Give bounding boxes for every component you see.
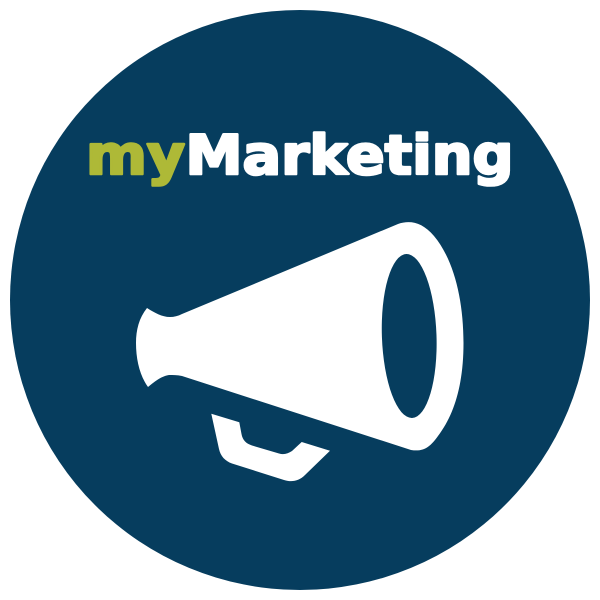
title part: Marketing: Marketing	[186, 124, 514, 187]
megaphone opening	[379, 253, 439, 419]
megaphone horn	[136, 222, 464, 450]
icon: megaphone	[136, 222, 464, 481]
title: myMarketing	[86, 124, 514, 187]
megaphone handle	[211, 414, 330, 481]
title part: my: my	[86, 124, 185, 187]
